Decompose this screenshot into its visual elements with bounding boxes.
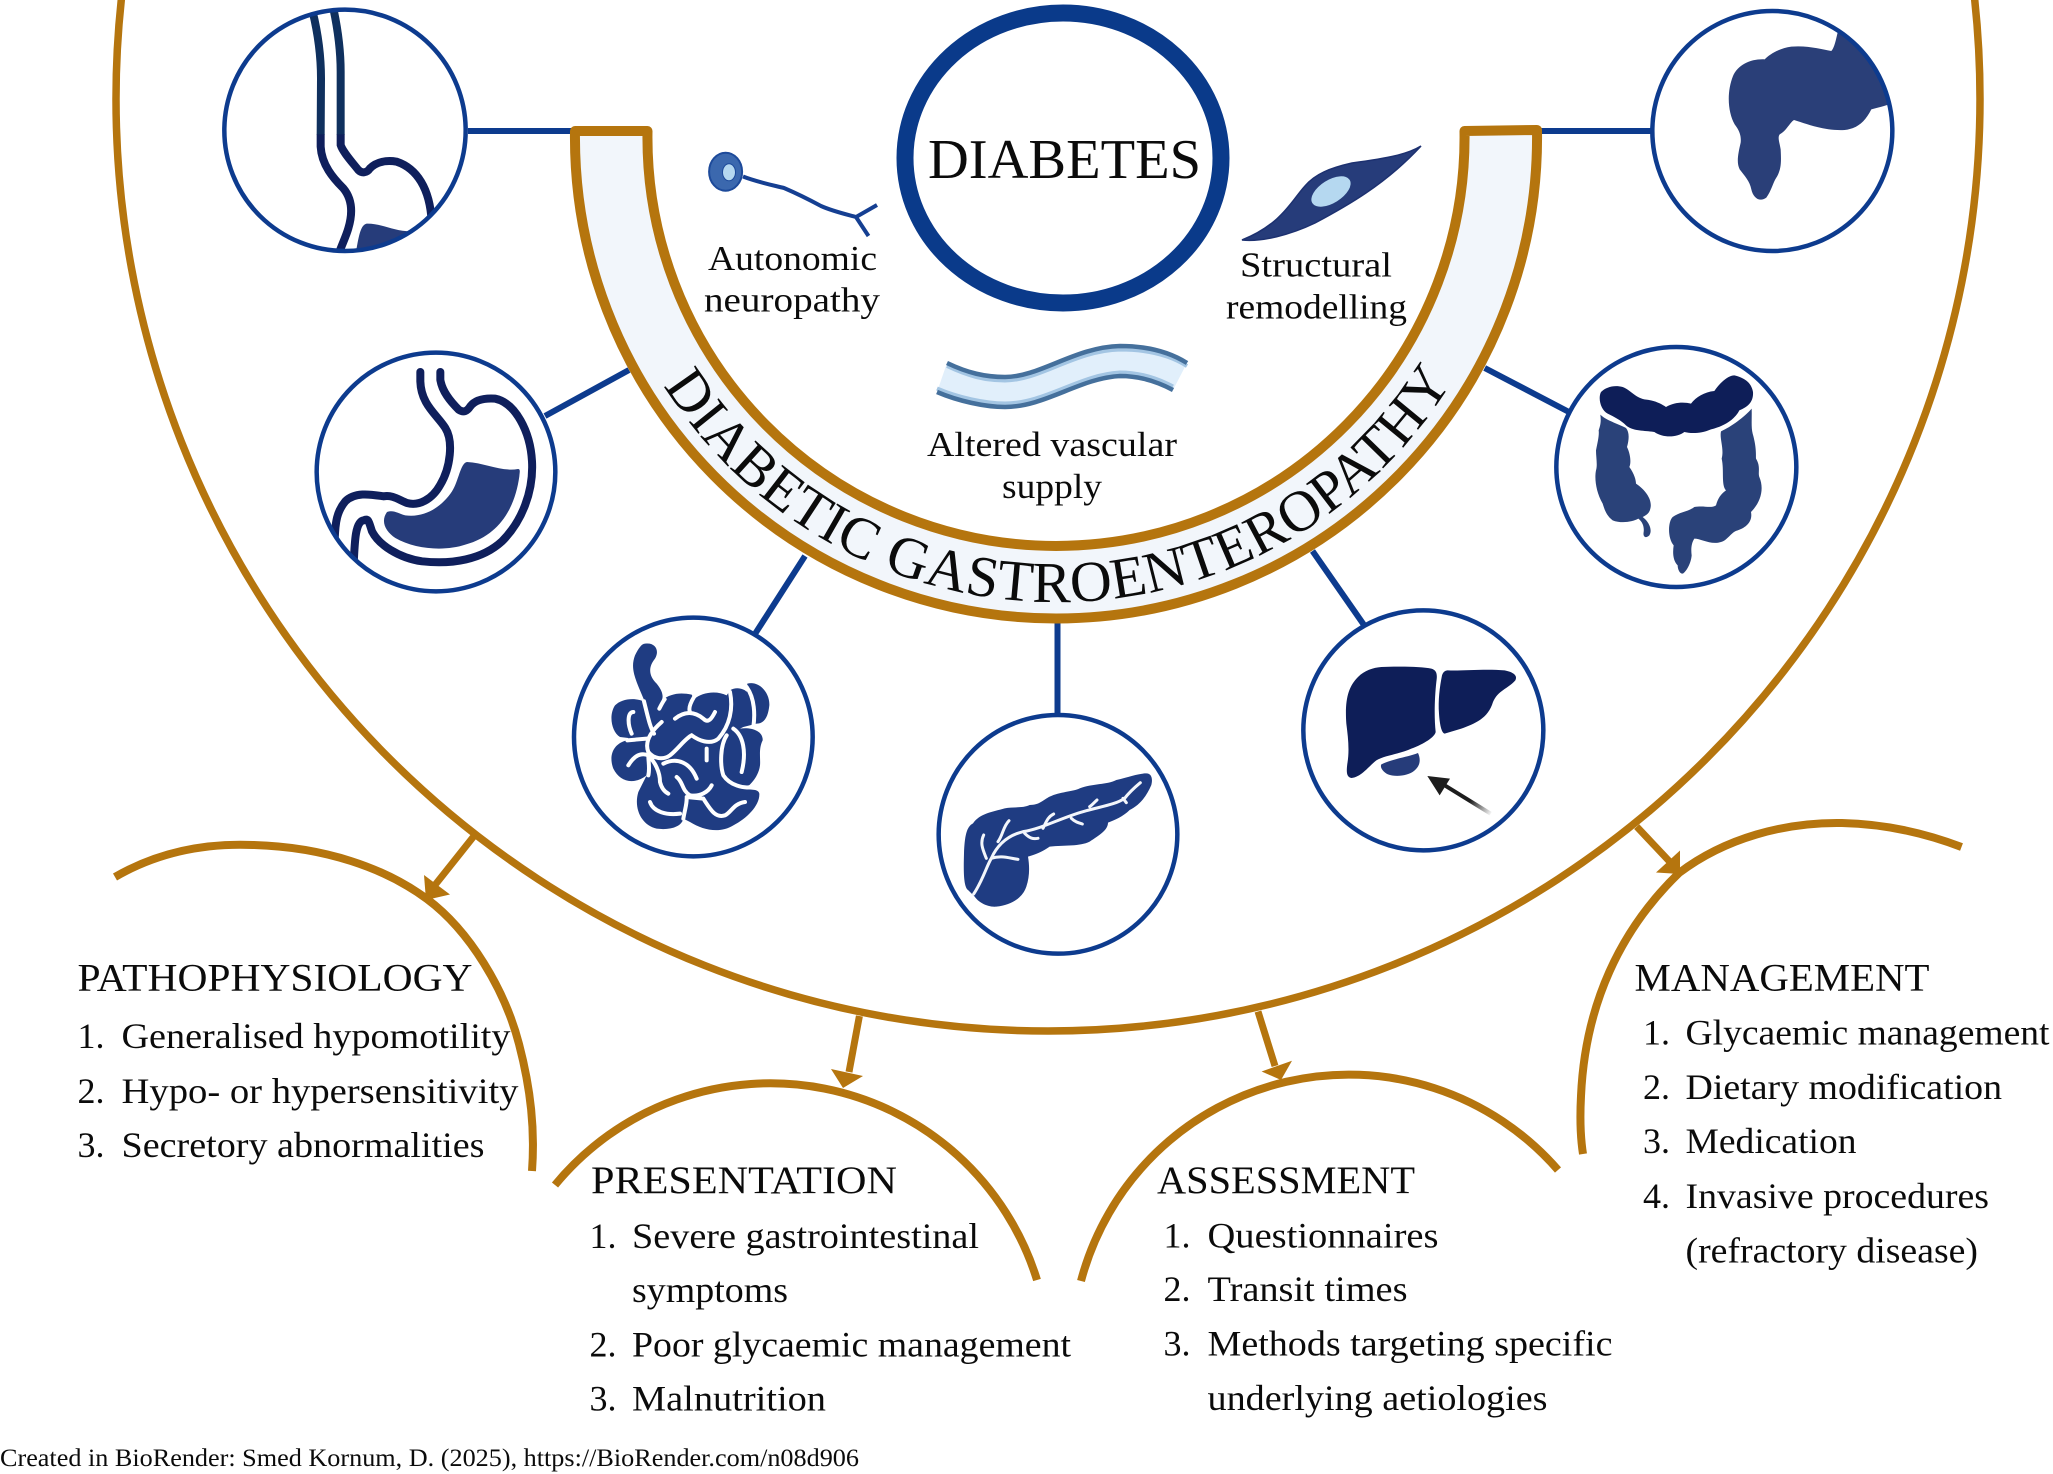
management text block: 4. <box>1643 1176 1670 1216</box>
presentation text block: Poor glycaemic management <box>632 1324 1071 1364</box>
management text block: Medication <box>1686 1121 1856 1161</box>
diabetic gastroenteropathy band <box>570 125 1542 624</box>
structural remodelling label: remodelling <box>1226 288 1407 326</box>
organ circle: oesophagus <box>224 8 466 262</box>
organ circle: small intestine <box>574 618 813 856</box>
pathophysiology text block: 3. <box>78 1125 104 1165</box>
pathophysiology text block: Generalised hypomotility <box>122 1016 510 1056</box>
management text block: Dietary modification <box>1686 1067 2002 1107</box>
organ circle: stomach <box>317 353 555 591</box>
presentation text block <box>590 1159 1071 1418</box>
management text block: 3. <box>1643 1121 1670 1161</box>
icon: neuron <box>709 153 877 236</box>
diabetes label: DIABETES <box>928 129 1201 191</box>
pathophysiology text block: PATHOPHYSIOLOGY <box>78 956 472 1000</box>
arrow: to assessment <box>1258 1012 1292 1080</box>
assessment text block: underlying aetiologies <box>1208 1378 1548 1418</box>
organ circle: pancreas <box>939 715 1177 954</box>
presentation text block: 1. <box>590 1216 616 1256</box>
presentation text block: Severe gastrointestinal <box>632 1216 979 1256</box>
icon: arrow <box>1427 776 1491 814</box>
assessment text block: ASSESSMENT <box>1157 1159 1415 1202</box>
organ circle: colon <box>1556 347 1796 587</box>
pathophysiology text block: 1. <box>78 1016 104 1056</box>
arc: assessment <box>1081 1075 1558 1281</box>
attribution footer: Created in BioRender: Smed Kornum, D. (2025), https://BioRender.com/n08d906 <box>0 1445 859 1472</box>
autonomic neuropathy label: neuropathy <box>704 280 881 320</box>
management text block: (refractory disease) <box>1686 1230 1978 1270</box>
large outer gold circle <box>116 0 1980 1031</box>
assessment text block: 2. <box>1164 1269 1190 1309</box>
icon: blood vessel <box>937 346 1187 407</box>
autonomic neuropathy label: Autonomic <box>708 239 877 278</box>
assessment text block: 1. <box>1164 1216 1190 1256</box>
organ circle: liver and gallbladder <box>1303 610 1543 850</box>
arc: management <box>1580 823 1962 1154</box>
altered vascular supply label <box>927 425 1177 506</box>
management text block <box>1634 956 2050 1270</box>
connector lines between organ circles and band <box>468 131 1652 714</box>
altered vascular supply label: Altered vascular <box>927 425 1177 464</box>
presentation text block: 3. <box>590 1378 616 1418</box>
autonomic neuropathy label <box>704 239 881 320</box>
pathophysiology text block: Hypo- or hypersensitivity <box>122 1071 518 1111</box>
management text block: 2. <box>1643 1067 1670 1107</box>
assessment text block: Transit times <box>1208 1269 1408 1309</box>
presentation text block: symptoms <box>632 1270 788 1310</box>
band title: DIABETIC GASTROENTEROPATHY <box>664 362 1446 602</box>
assessment text block: Methods targeting specific <box>1208 1324 1612 1364</box>
presentation text block: Malnutrition <box>632 1378 826 1418</box>
arc: pathophysiology <box>115 845 533 1171</box>
arrow: to presentation <box>831 1016 863 1088</box>
assessment text block: 3. <box>1164 1324 1190 1364</box>
structural remodelling label <box>1226 246 1407 326</box>
assessment text block <box>1157 1159 1612 1418</box>
presentation text block: 2. <box>590 1324 616 1364</box>
presentation text block: PRESENTATION <box>591 1159 897 1202</box>
management text block: MANAGEMENT <box>1634 956 1930 1000</box>
management text block: 1. <box>1643 1012 1670 1052</box>
arrow: to pathophysiology <box>424 836 474 900</box>
management text block: Invasive procedures <box>1686 1176 1989 1216</box>
pathophysiology text block <box>78 956 518 1165</box>
pathophysiology text block: 2. <box>78 1071 104 1111</box>
diabetes circle <box>905 13 1221 303</box>
pathophysiology text block: Secretory abnormalities <box>122 1125 484 1165</box>
organ circle: rectum and anal canal <box>1652 11 1895 251</box>
icon: muscle cell <box>1242 146 1421 240</box>
structural remodelling label: Structural <box>1240 246 1392 284</box>
arc: presentation <box>555 1083 1037 1280</box>
arrow: to management <box>1637 827 1680 874</box>
assessment text block: Questionnaires <box>1208 1216 1438 1256</box>
altered vascular supply label: supply <box>1002 467 1103 506</box>
management text block: Glycaemic management <box>1686 1012 2050 1052</box>
